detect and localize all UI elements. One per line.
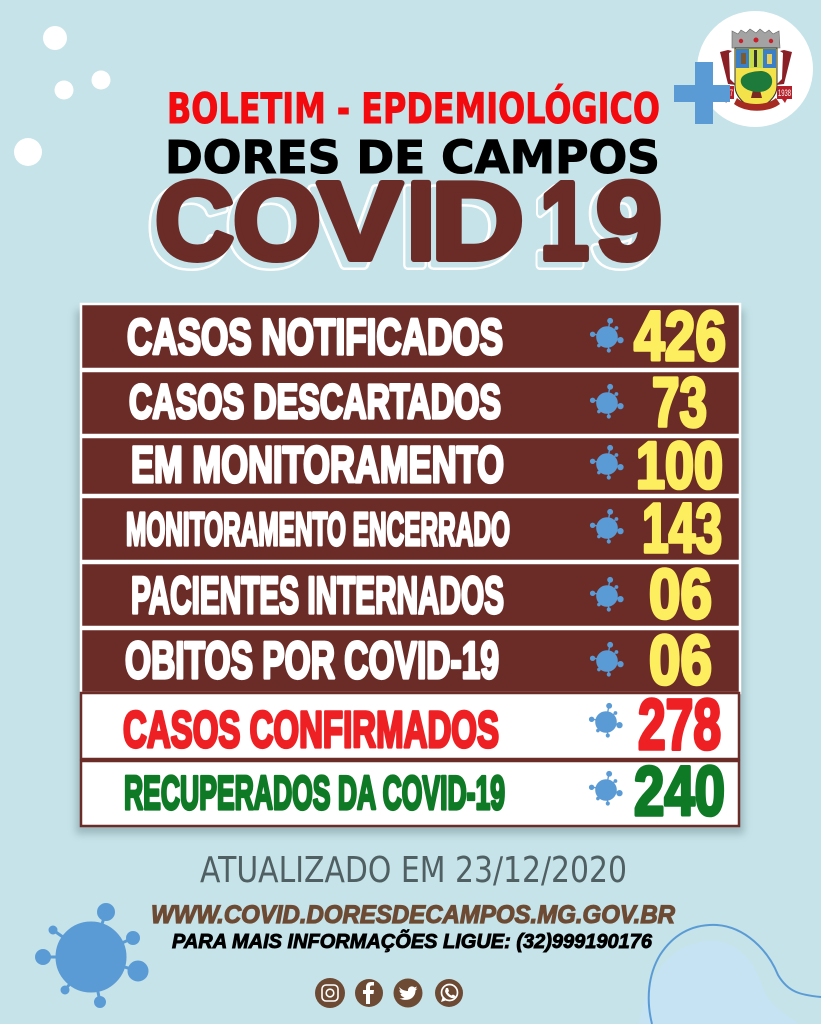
row: obitos: 06 — [649, 621, 712, 699]
decorative blob bottom right — [639, 925, 821, 1024]
title: covid 19: V — [318, 160, 402, 283]
update date: ATUALIZADO EM 23/12/2020 — [200, 850, 627, 891]
title: covid 19: 9 — [590, 166, 656, 289]
crest crown — [732, 29, 780, 48]
row: recuperados: RECUPERADOS DA COVID-19 — [124, 766, 505, 819]
title: covid 19: 9 — [596, 160, 662, 283]
website: WWW.COVID.DORESDECAMPOS.MG.GOV.BR — [151, 901, 675, 929]
plus sign — [674, 62, 730, 124]
row: casos descartados — [81, 363, 740, 441]
title: covid 19: D — [431, 160, 524, 283]
phone line: PARA MAIS INFORMAÇÕES LIGUE: (32)999190176 — [172, 929, 653, 953]
title: covid 19: O — [227, 166, 315, 289]
row: recuperados — [81, 752, 739, 830]
title: covid 19: 1 — [534, 166, 583, 289]
title: covid 19: O — [233, 160, 321, 283]
title: covid 19: I — [401, 166, 429, 289]
title: covid 19: 1 — [534, 166, 583, 289]
title: covid 19: 1 — [540, 160, 589, 283]
row: pacientes internados: 06 — [649, 555, 712, 633]
title: covid 19: I — [407, 160, 435, 283]
icon: large virus — [36, 904, 148, 1008]
title: covid 19: D — [425, 166, 518, 289]
title: covid 19: C — [149, 166, 228, 289]
row: casos descartados: 73 — [652, 363, 707, 441]
title: covid 19 — [149, 160, 662, 289]
row: casos notificados: 426 — [634, 297, 726, 375]
row: casos descartados: CASOS DESCARTADOS — [129, 376, 501, 429]
title: dores de campos: DORES DE CAMPOS — [165, 131, 660, 184]
title: covid 19: O — [227, 166, 315, 289]
row: recuperados: 240 — [634, 752, 725, 830]
row: casos confirmados: CASOS CONFIRMADOS — [123, 701, 499, 758]
crest tree — [751, 90, 762, 98]
row: casos notificados: CASOS NOTIFICADOS — [127, 309, 503, 365]
icon: facebook — [355, 979, 383, 1007]
crest ribbons — [734, 98, 780, 111]
row: casos confirmados — [81, 686, 739, 765]
logo badge: municipal crest: 1938 — [778, 88, 791, 98]
decorative white dots — [14, 26, 110, 166]
title: covid 19: D — [425, 166, 518, 289]
crest shield — [735, 48, 777, 110]
row: pacientes internados: PACIENTES INTERNADOS — [131, 567, 504, 625]
title: covid 19: V — [312, 166, 396, 289]
title: boletim: BOLETIM - EPDEMIOLÓGICO — [167, 83, 660, 133]
title: covid 19: I — [401, 166, 429, 289]
row: casos notificados — [81, 297, 740, 375]
icon: instagram — [315, 978, 345, 1008]
title: covid 19: V — [312, 166, 396, 289]
table shadow — [76, 310, 744, 834]
row: obitos — [81, 621, 740, 699]
logo badge: municipal crest — [697, 11, 813, 127]
row: monitoramento encerrado — [81, 489, 740, 567]
row: em monitoramento — [81, 428, 740, 502]
social icons — [315, 978, 463, 1008]
row: em monitoramento: EM MONITORAMENTO — [131, 436, 504, 493]
icon: whatsapp — [435, 979, 463, 1007]
row: obitos: OBITOS POR COVID-19 — [125, 632, 499, 690]
row: casos confirmados: 278 — [638, 686, 721, 765]
icon: twitter — [394, 978, 422, 1008]
crest mantling — [720, 50, 792, 85]
row: monitoramento encerrado: 143 — [642, 489, 722, 567]
logo badge: municipal crest: 1717 — [720, 88, 733, 98]
title: covid 19: 9 — [590, 166, 656, 289]
row: em monitoramento: 100 — [636, 428, 723, 502]
title: covid 19: C — [149, 166, 228, 289]
title: covid 19: C — [155, 160, 234, 283]
row: pacientes internados — [81, 555, 740, 633]
